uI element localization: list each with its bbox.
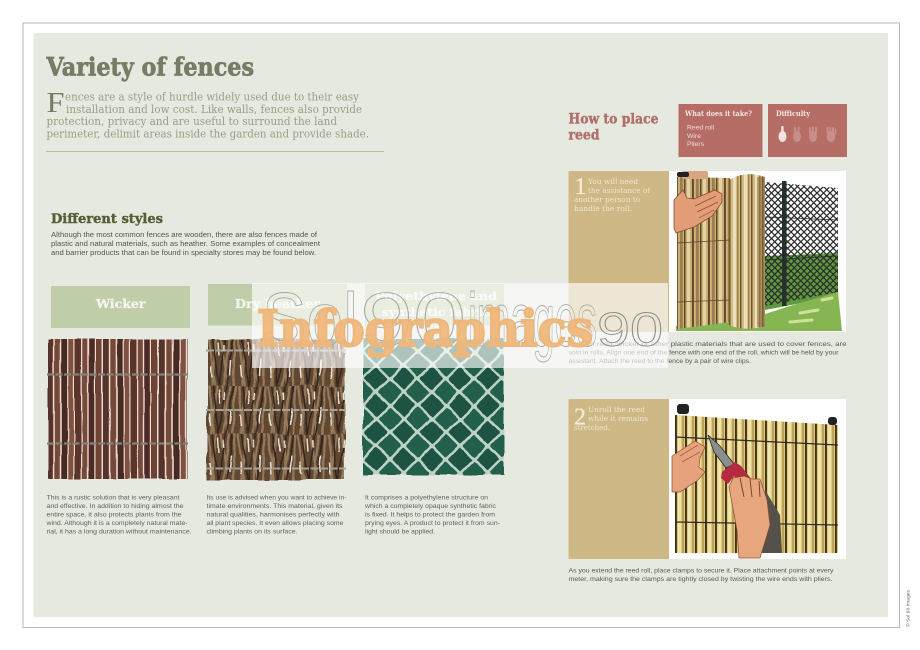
- step 2 caption: meter, making sure the clamps are tightly closed by twisting the wire ends with pliers.: [568, 576, 833, 583]
- heading: how to place reed: [568, 112, 658, 144]
- heading: different styles: Different styles: [51, 212, 163, 227]
- title: Variety of fences: [46, 52, 254, 82]
- text: different styles intro: and barrier products that can be found in specialty stores may be found below.: [51, 250, 316, 257]
- watermark: Infographics: [257, 299, 593, 358]
- watermark: images: [468, 278, 597, 363]
- text: different styles intro: Although the most common fences are wooden, there are also fences made of: [51, 232, 317, 239]
- panel: what does it take: Wire: [687, 133, 701, 140]
- text: wicker description: and effective. In addition to hiding almost the: [46, 503, 184, 510]
- label: dry heather: Dry heather: [235, 297, 321, 311]
- left hand: [672, 441, 705, 492]
- icon: open hand, inactive: [826, 126, 836, 142]
- shadow of hand: [762, 490, 782, 553]
- icon: hand, active: [778, 126, 786, 142]
- heading: how to place reed: reed: [568, 128, 600, 144]
- step 1 text panel: the assistance of: [588, 186, 651, 195]
- text: polyethylene description: It comprises a polyethylene structure on: [365, 494, 488, 502]
- step 1 text panel: handle the roll.: [574, 204, 632, 213]
- step 1 text panel: another person to: [574, 195, 640, 204]
- drop cap: F: [46, 87, 64, 119]
- step 1 text panel: 1: [574, 174, 586, 200]
- step 1 caption: [568, 341, 847, 365]
- text: polyethylene description: light should be applied.: [365, 528, 435, 536]
- text: dry heather description: climbing plants on its surface.: [206, 528, 298, 536]
- watermark: [252, 278, 668, 368]
- foreground grass: [676, 292, 842, 331]
- text: wicker description: entire space, it also protects plants from the: [46, 512, 182, 518]
- panel: difficulty: Difficulty: [776, 109, 811, 118]
- wires: [675, 437, 838, 525]
- text: dry heather description: timate environments. This material, given its: [206, 503, 343, 510]
- icon: hand, inactive: [793, 126, 801, 142]
- label: polyethylene and synthetic fabric: [365, 284, 504, 326]
- step 2 caption: [568, 568, 834, 583]
- text: wicker description: [45, 494, 192, 536]
- label: polyethylene and synthetic fabric: synthetic fabric: [382, 305, 490, 319]
- post caps: [677, 404, 689, 414]
- text: wicker description: rial, it has a long duration without maintenance.: [46, 528, 192, 536]
- text: polyethylene description: [364, 494, 500, 536]
- panel: what does it take: Pliers: [687, 141, 705, 148]
- text: dry heather description: [206, 494, 346, 536]
- reed sheet: [677, 177, 730, 329]
- step 2 text panel: stretched.: [574, 423, 610, 432]
- step 2 text panel: while it remains: [588, 414, 648, 423]
- background grass behind fence: [765, 253, 838, 310]
- chain fence: [765, 182, 838, 306]
- step 2 caption: As you extend the reed roll, place clamps to secure it. Place attachment points at every: [568, 568, 834, 574]
- step 2 text panel: 2: [574, 404, 586, 430]
- intro paragraph: installation and low cost. Like walls, fences also provide: [66, 103, 362, 116]
- reed roll: [729, 174, 765, 329]
- watermark: 90: [360, 278, 466, 363]
- top hand: [682, 171, 708, 179]
- fence post: [782, 181, 786, 306]
- text: dry heather description: Its use is advised when you want to achieve in-: [206, 494, 346, 502]
- watermark: Sol: [262, 278, 358, 363]
- text: different styles intro: plastic and natural materials, such as heather. Some examples of concealment: [51, 241, 320, 248]
- watermark: 90: [597, 302, 663, 356]
- heading: how to place reed: How to place: [568, 112, 658, 128]
- label: wicker: Wicker: [95, 297, 146, 311]
- text: wicker description: wind. Although it is a completely natural mate-: [45, 520, 187, 527]
- panel: what does it take: [678, 104, 762, 157]
- grass highlights: [790, 298, 832, 322]
- step 2 text panel: [568, 399, 669, 559]
- icon: two fingers, inactive: [809, 126, 817, 142]
- text: dry heather description: all plant species. It even allows placing some: [206, 520, 344, 527]
- label: wicker: [51, 286, 190, 328]
- text: polyethylene description: prying eyes. A product to protect it from sun-: [365, 520, 500, 527]
- illustration: dry heather fence: [206, 339, 346, 480]
- illustration: green synthetic mesh: [363, 339, 504, 475]
- text: polyethylene description: is fixed. It helps to protect the garden from: [365, 512, 496, 518]
- illustration: wicker fence: [47, 339, 188, 479]
- step 1 caption: sold in rolls. Align one end of the fence with one end of the roll, which will be held by your: [568, 350, 839, 356]
- credit: © Sol 90 Images: [904, 589, 910, 627]
- panel: what does it take: Reed roll: [687, 124, 715, 132]
- pliers: [708, 435, 734, 468]
- step 1 text panel: [568, 171, 669, 332]
- step 2 illustration: securing reed with pliers: [669, 399, 846, 559]
- text: wicker description: This is a rustic solution that is very pleasant: [46, 494, 180, 502]
- step 1 caption: Rolls of reed, wicker or other plastic materials that are used to cover fences, are: [568, 341, 847, 348]
- text: polyethylene description: which a completely opaque synthetic fabric: [364, 503, 497, 510]
- intro paragraph: perimeter, delimit areas inside the garden and provide shade.: [46, 127, 369, 140]
- text: different styles intro: [51, 232, 320, 257]
- step 1 illustration: unrolling reed over a chain fence: [669, 171, 846, 332]
- label: dry heather: [208, 284, 347, 326]
- step 2 text panel: Unroll the reed: [588, 405, 645, 414]
- intro paragraph: protection, privacy and are useful to surround the land: [46, 115, 337, 128]
- hand holding reed: [674, 190, 722, 233]
- label: polyethylene and synthetic fabric: Polyethylene and: [375, 289, 497, 303]
- intro paragraph: [46, 87, 369, 140]
- right hand: [729, 476, 770, 558]
- panel: what does it take: What does it take?: [684, 109, 752, 118]
- intro paragraph: ences are a style of hurdle widely used due to their easy: [65, 90, 360, 104]
- reed sheet: [675, 415, 838, 553]
- panel: difficulty: [768, 104, 847, 157]
- text: dry heather description: natural qualities, harmonises perfectly with: [206, 512, 340, 518]
- step 1 caption: assistant. Attach the reed to the fence by a pair of wire clips.: [568, 358, 751, 365]
- step 1 text panel: You will need: [587, 177, 638, 186]
